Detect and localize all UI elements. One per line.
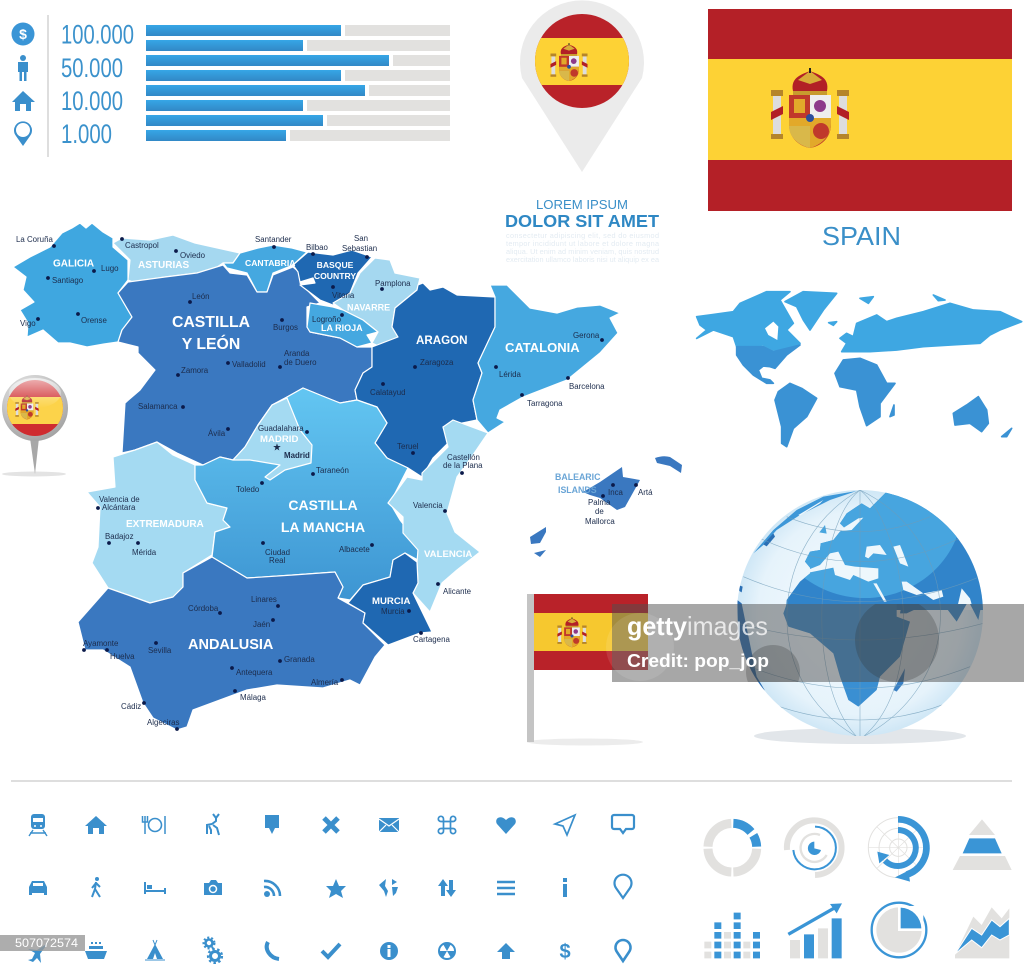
city dots and names: Aranda bbox=[284, 349, 310, 358]
donut chart bbox=[708, 823, 757, 872]
city dots and names: Artá bbox=[638, 488, 653, 497]
city dots and names: Valencia de bbox=[99, 495, 140, 504]
city dots and names: Palma bbox=[588, 498, 611, 507]
city dots and names: Badajoz bbox=[105, 532, 134, 541]
icon: plane bbox=[28, 943, 48, 963]
city dots and names: Zamora bbox=[181, 366, 209, 375]
region labels: COUNTRY bbox=[314, 271, 356, 281]
region labels: BASQUE bbox=[317, 260, 354, 270]
city dots and names: Salamanca bbox=[138, 402, 178, 411]
icon: ship bbox=[85, 943, 107, 959]
region labels: EXTREMADURA bbox=[126, 519, 204, 530]
city dots and names: Jaén bbox=[253, 620, 270, 629]
region: Basque Country bbox=[293, 250, 372, 305]
region: Extremadura bbox=[87, 442, 230, 603]
concentric arcs chart bbox=[787, 820, 842, 875]
city dots and names: Alcántara bbox=[102, 503, 136, 512]
region labels: NAVARRE bbox=[347, 302, 390, 312]
icon: info i bbox=[563, 878, 567, 897]
heading text block bbox=[505, 197, 660, 264]
icon grid bbox=[28, 814, 634, 963]
area chart bbox=[955, 907, 1009, 958]
credit text bbox=[627, 611, 769, 671]
numbers: 100.000 bbox=[61, 20, 134, 50]
region labels: VALENCIA bbox=[424, 549, 472, 560]
city dots and names: Guadalahara bbox=[258, 424, 304, 433]
statistics panel bbox=[12, 15, 450, 157]
credit text: gettyimages bbox=[627, 611, 768, 641]
icon: up arrow bbox=[497, 943, 515, 959]
icon: check bbox=[322, 944, 340, 957]
city dots and names: Murcia bbox=[381, 607, 405, 616]
icon: globe bbox=[379, 879, 398, 897]
city dots and names: Ciudad bbox=[265, 548, 290, 557]
map of Spain bbox=[13, 223, 682, 730]
city dots and names: Logroño bbox=[312, 315, 342, 324]
city dots and names: Linares bbox=[251, 595, 277, 604]
region: Aragon bbox=[355, 283, 495, 477]
city dots and names: Zaragoza bbox=[420, 358, 454, 367]
icon: command key bbox=[438, 816, 456, 834]
region: La Rioja bbox=[307, 303, 378, 347]
region labels bbox=[53, 258, 601, 653]
city dots and names: León bbox=[192, 292, 210, 301]
icon: rss bbox=[264, 881, 280, 897]
region labels: CANTABRIA bbox=[245, 258, 295, 268]
icon: envelope bbox=[379, 818, 399, 832]
radar with arrows bbox=[868, 818, 928, 882]
heading text block: DOLOR SIT AMET bbox=[505, 211, 659, 231]
city dots and names: Albacete bbox=[339, 545, 370, 554]
icon: walker bbox=[92, 877, 100, 897]
icon: cutlery bbox=[142, 816, 165, 834]
country name: SPAIN bbox=[822, 221, 901, 251]
city dots and names: Toledo bbox=[236, 485, 260, 494]
city dots and names: Santiago bbox=[52, 276, 84, 285]
city dots and names: Sebastian bbox=[342, 244, 377, 253]
city dots and names bbox=[16, 234, 653, 731]
flag of Spain bbox=[708, 9, 1012, 211]
icon: cross bbox=[324, 818, 338, 832]
city dots and names: Pamplona bbox=[375, 279, 411, 288]
region labels: ANDALUSIA bbox=[188, 637, 274, 653]
icon: tent bbox=[145, 940, 165, 960]
city dots and names: Valencia bbox=[413, 501, 443, 510]
numbers: 50.000 bbox=[61, 53, 123, 83]
icon: up and down arrows bbox=[438, 879, 456, 897]
city dots and names: de bbox=[595, 507, 604, 516]
city dots and names: Inca bbox=[608, 488, 624, 497]
region labels: CATALONIA bbox=[505, 340, 580, 355]
city dots and names: Taraneón bbox=[316, 466, 349, 475]
landmasses north of the band bbox=[738, 491, 997, 610]
heading text block: aliqua. Ut enim ad minim veniam, quis nostrud bbox=[506, 247, 659, 256]
pie chart bbox=[872, 903, 926, 957]
city dots and names: Oviedo bbox=[180, 251, 206, 260]
city dots and names: Santander bbox=[255, 235, 292, 244]
flag on pole bbox=[527, 594, 648, 746]
glossy pin with flag bbox=[2, 375, 68, 476]
city dots and names: Vitoria bbox=[332, 291, 355, 300]
city dots and names: ★ bbox=[272, 442, 282, 454]
numbers: 10.000 bbox=[61, 86, 123, 116]
city dots and names: Lugo bbox=[101, 264, 119, 273]
city dots and names: Málaga bbox=[240, 693, 266, 702]
city dots and names: de Duero bbox=[284, 358, 317, 367]
city dots and names: Tarragona bbox=[527, 399, 563, 408]
equalizer chart bbox=[704, 913, 760, 958]
icon: gears bbox=[204, 938, 222, 963]
region labels: LA MANCHA bbox=[281, 519, 365, 535]
icon: dollar coin: $ bbox=[19, 26, 27, 42]
region labels: GALICIA bbox=[53, 258, 94, 270]
icon: pin round bbox=[616, 940, 630, 961]
city dots and names: Córdoba bbox=[188, 604, 219, 613]
city dots and names: Burgos bbox=[273, 323, 298, 332]
region labels: Y LEÓN bbox=[182, 334, 240, 353]
region labels: ASTURIAS bbox=[138, 260, 189, 271]
region: Catalonia bbox=[473, 285, 620, 433]
city dots and names: Valladolid bbox=[232, 360, 266, 369]
grid bbox=[738, 490, 983, 737]
icon: info circle bbox=[380, 942, 398, 960]
city dots and names: Castropol bbox=[125, 241, 159, 250]
icon: car bbox=[29, 881, 47, 895]
region: Madrid bbox=[233, 398, 312, 480]
region: Cantabria bbox=[223, 245, 307, 292]
seas bbox=[798, 500, 973, 610]
city dots and names: Vigo bbox=[20, 319, 36, 328]
city dots and names: Cádiz bbox=[121, 702, 141, 711]
icon: speech bubble bbox=[612, 815, 634, 833]
city dots and names: Mérida bbox=[132, 548, 157, 557]
city dots and names: Lérida bbox=[499, 370, 522, 379]
icon: person bbox=[18, 55, 28, 81]
heading text block: consectetur adipiscing elit, sed do eiusmod bbox=[506, 231, 659, 240]
icon: train bbox=[29, 814, 47, 836]
icon: dollar: $ bbox=[559, 941, 571, 963]
icon: camera bbox=[204, 880, 222, 895]
region: Murcia bbox=[348, 553, 432, 645]
heading text block: LOREM IPSUM bbox=[536, 197, 628, 212]
region labels: LA RIOJA bbox=[321, 323, 363, 333]
region labels: CASTILLA bbox=[288, 497, 358, 513]
icon: pin outline bbox=[614, 875, 632, 898]
city dots and names: Orense bbox=[81, 316, 107, 325]
region labels: CASTILLA bbox=[172, 314, 250, 331]
city dots and names: Ávila bbox=[208, 429, 226, 438]
image number tag: 507072574 bbox=[15, 938, 79, 950]
region labels: ISLANDS bbox=[558, 485, 597, 495]
city dots and names: Cartagena bbox=[413, 635, 450, 644]
bar chart bbox=[146, 25, 450, 141]
city dots and names: Teruel bbox=[397, 442, 419, 451]
heading text block: exercitation ullamco laboris nisi ut aliquip ex ea bbox=[506, 255, 660, 264]
map pin with flag bbox=[520, 0, 644, 172]
region labels: ARAGON bbox=[416, 334, 468, 347]
city dots and names: Madrid bbox=[284, 451, 310, 460]
city dots and names: Huelva bbox=[110, 652, 135, 661]
region labels: MURCIA bbox=[372, 596, 410, 607]
region: Galicia bbox=[13, 223, 132, 347]
city dots and names: Granada bbox=[284, 655, 315, 664]
icon: heart bbox=[496, 817, 516, 834]
lands south of the band bbox=[737, 490, 983, 737]
city dots and names: Antequera bbox=[236, 668, 273, 677]
chart icons bbox=[704, 818, 1012, 958]
region: Balearic Islands bbox=[530, 456, 682, 557]
region: Valencia bbox=[388, 420, 488, 612]
icon: map marker bbox=[265, 815, 279, 834]
city dots and names: Ayamonte bbox=[83, 639, 119, 648]
city dots and names: de la Plana bbox=[443, 461, 483, 470]
city dots and names: Mallorca bbox=[585, 517, 615, 526]
city dots and names: Calatayud bbox=[370, 388, 406, 397]
city dots and names: Almería bbox=[311, 678, 339, 687]
city dots and names: San bbox=[354, 234, 368, 243]
city dots and names: Gerona bbox=[573, 331, 600, 340]
icon: location pin bbox=[14, 121, 32, 146]
numbers bbox=[61, 20, 134, 149]
icon: bed bbox=[145, 882, 165, 894]
image number tag bbox=[0, 935, 85, 951]
world map bbox=[697, 292, 1022, 447]
region: Navarre bbox=[333, 258, 420, 350]
globe bbox=[737, 490, 997, 744]
city dots and names: Sevilla bbox=[148, 646, 172, 655]
watermark band bbox=[606, 604, 1024, 682]
city dots and names: Barcelona bbox=[569, 382, 605, 391]
city dots and names: Real bbox=[269, 556, 285, 565]
icon: star bbox=[326, 879, 346, 898]
region labels: MADRID bbox=[260, 434, 298, 445]
region: Asturias bbox=[113, 235, 240, 282]
icon: radiation bbox=[439, 943, 455, 959]
city dots and names: Castellón bbox=[447, 453, 480, 462]
icon: deer bbox=[207, 814, 219, 835]
pyramid bbox=[953, 819, 1012, 870]
icon: house bbox=[85, 816, 107, 834]
icon: house bbox=[12, 91, 35, 111]
city dots and names: Algeciras bbox=[147, 718, 180, 727]
icon: menu lines bbox=[497, 882, 515, 894]
icon: dollar coin bbox=[12, 22, 34, 46]
city dots and names: La Coruña bbox=[16, 235, 53, 244]
region: Castilla La Mancha bbox=[195, 388, 418, 600]
icon: phone bbox=[267, 942, 279, 959]
region labels: BALEARIC bbox=[555, 472, 601, 482]
city dots and names: Alicante bbox=[443, 587, 472, 596]
credit text: Credit: pop_jop bbox=[627, 650, 769, 671]
region: Andalusia bbox=[78, 557, 385, 730]
region: Castilla y León bbox=[118, 265, 372, 465]
numbers: 1.000 bbox=[61, 119, 112, 149]
rising bars with arrow bbox=[788, 903, 842, 958]
heading text block: tempor incididunt ut labore et dolore magna bbox=[506, 239, 660, 248]
city dots and names: Bilbao bbox=[306, 243, 329, 252]
icon: navigation arrow bbox=[555, 815, 575, 835]
